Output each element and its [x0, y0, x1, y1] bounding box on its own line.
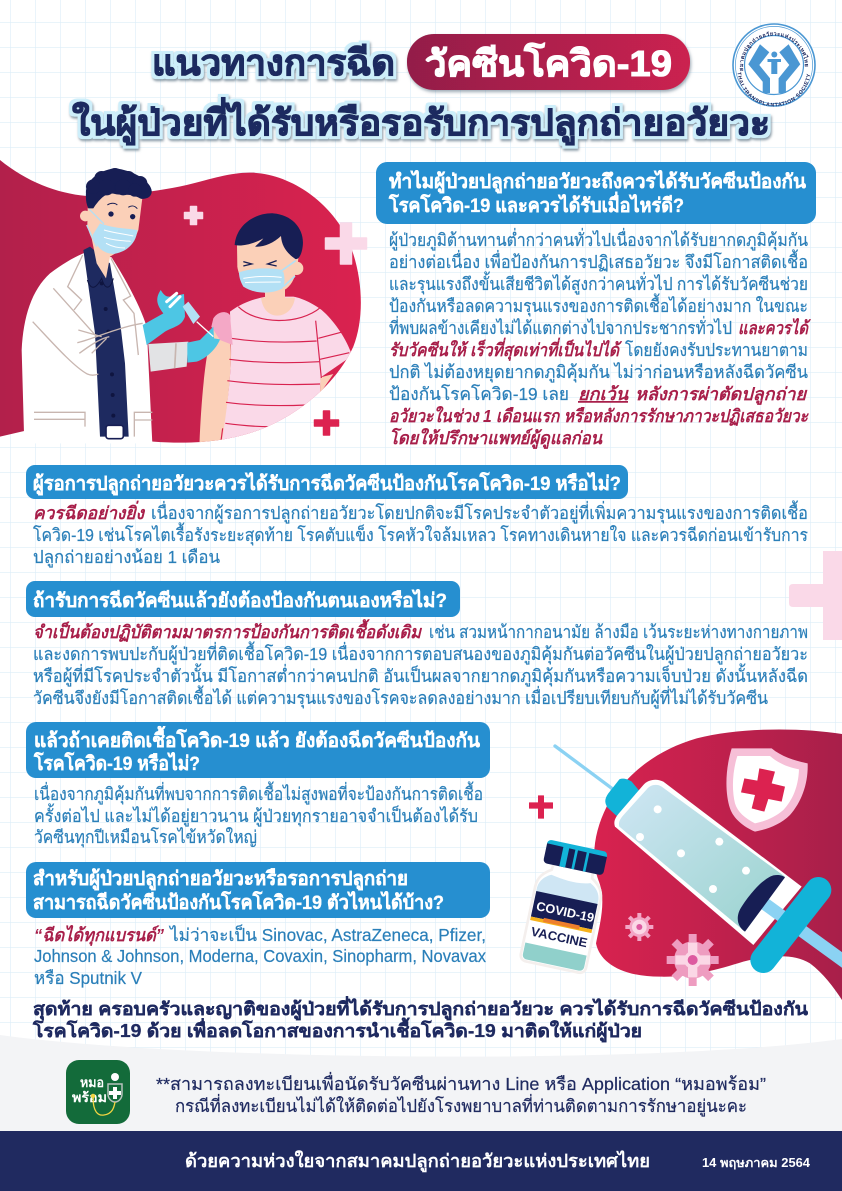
- heading: โรคโควิด-19 และควรได้รับเมื่อไหร่ดี?: [388, 191, 684, 217]
- heading: สามารถฉีดวัคซีนป้องกันโรคโควิด-19 ตัวไหนได้บ้าง?: [33, 891, 444, 914]
- title: [72, 34, 770, 146]
- text block: โดยให้ปรึกษาแพทย์ผู้ดูแลก่อน: [389, 427, 603, 449]
- plus: pink large: [326, 223, 366, 264]
- text block: Johnson & Johnson, Moderna, Covaxin, Sinopharm, Novavax: [34, 946, 486, 966]
- text block: วัคซีนทุกปีเหมือนโรคไข้หวัดใหญ่: [34, 827, 257, 848]
- text block: ผู้ป่วยภูมิต้านทานต่ำกว่าคนทั่วไปเนื่องจากได้รับยากดภูมิคุ้มกัน: [389, 228, 808, 251]
- closing statement: โรคโควิด-19 ด้วย เพื่อลดโอกาสของการนำเชื้อโควิด-19 มาติดให้แก่ผู้ป่วย: [32, 1017, 642, 1043]
- red blob: [0, 160, 361, 443]
- heading: ทำไมผู้ป่วยปลูกถ่ายอวัยวะถึงควรได้รับวัคซีนป้องกัน: [389, 170, 807, 195]
- syringe: [555, 746, 842, 963]
- text block: โดยยังคงรับประทานยาตาม: [625, 340, 808, 360]
- patient: [199, 297, 351, 447]
- virus large: [667, 934, 719, 986]
- heading: สำหรับผู้ป่วยปลูกถ่ายอวัยวะหรือรอการปลูกถ่าย: [33, 868, 408, 892]
- text block: ป้องกันหรือลดความรุนแรงของการติดเชื้อได้อย่างมาก ในขณะ: [389, 293, 808, 317]
- panel: which vaccines: [26, 862, 490, 988]
- panel: waiting for transplant: [26, 465, 808, 568]
- text block: เนื่องจากภูมิคุ้มกันที่พบจากการติดเชื้อไม่สูงพอที่จะป้องกันการติดเชื้อ: [34, 781, 483, 805]
- panel: still protect yourself: [26, 581, 808, 709]
- footer bar: [0, 1131, 842, 1191]
- red blob: [594, 729, 842, 1000]
- text block: ปลูกถ่ายอย่างน้อย 1 เดือน: [33, 547, 220, 568]
- heading: แล้วถ้าเคยติดเชื้อโควิด-19 แล้ว ยังต้องฉีดวัคซีนป้องกัน: [34, 725, 481, 752]
- vaccine vial: [520, 839, 611, 974]
- text block: และควรได้: [738, 317, 811, 338]
- text block: ควรฉีดอย่างยิ่ง: [33, 500, 145, 523]
- virus small: [625, 913, 653, 941]
- plus: pink right edge: [789, 551, 842, 640]
- heading: [26, 722, 490, 778]
- heading: โรคโควิด-19 หรือไม่?: [33, 752, 200, 775]
- registration note: [156, 1072, 766, 1117]
- text block: หรือ Sputnik V: [34, 968, 142, 988]
- text block: ไม่ว่าจะเป็น Sinovac, AstraZeneca, Pfizer,: [168, 924, 486, 945]
- doctor: [22, 168, 220, 443]
- text block: ที่พบผลข้างเคียงไม่ได้แตกต่างไปจากประชากรทั่วไป: [389, 316, 732, 338]
- text block: จำเป็นต้องปฏิบัติตามมาตรการป้องกันการติดเชื้อดังเดิม: [33, 619, 422, 642]
- icon: MorPrompt app: พร้อม: [72, 1090, 107, 1105]
- vaccine vial: VACCINE: [530, 925, 589, 950]
- logo: Thai Transplantation Society: THAI TRANSPLANTATION SOCIETY: [738, 72, 810, 106]
- text block: วัคซีนจึงยังมีโอกาสติดเชื้อได้ แต่ความรุนแรงของโรคจะลดลงอย่างมาก เมื่อเปรียบเทียบกับผู้ที่ไม่ได้รับวัคซีน: [33, 685, 768, 709]
- text block: หรือผู้ที่มีโรคประจำตัวนั้น มีโอกาสต่ำกว่าคนปกติ อันเป็นผลจากยากดภูมิคุ้มกันหรือความเจ็บป่วย ดังนั้นหลังฉีด: [33, 663, 808, 687]
- heading: [26, 581, 460, 617]
- sleeve and gloves: [148, 342, 188, 372]
- patient head: [235, 213, 303, 302]
- registration note: กรณีที่ลงทะเบียนไม่ได้ให้ติดต่อไปยังโรงพยาบาลที่ท่านติดตามการรักษาอยู่นะคะ: [175, 1094, 747, 1117]
- logo: Thai Transplantation Society: สมาคมปลูกถ่ายอวัยวะแห่งประเทศไทย: [740, 31, 808, 71]
- logo: Thai Transplantation Society: [732, 23, 816, 107]
- text block: [34, 781, 483, 848]
- shield: [726, 748, 808, 832]
- text block: หลังการผ่าตัดปลูกถ่าย: [635, 384, 808, 405]
- footer bar: ด้วยความห่วงใยจากสมาคมปลูกถ่ายอวัยวะแห่งประเทศไทย: [185, 1150, 650, 1173]
- vaccine vial: COVID-19: [535, 899, 595, 925]
- footer band: [0, 1035, 842, 1191]
- footer bar: 14 พฤษภาคม 2564: [702, 1156, 810, 1170]
- text block: [389, 228, 811, 449]
- plus: red: [314, 411, 338, 435]
- plus: red: [529, 796, 553, 818]
- text block: [33, 500, 808, 568]
- text block: ยกเว้น: [578, 384, 629, 404]
- text block: ปกติ ไม่ต้องหยุดยากดภูมิคุ้มกัน ไม่ว่าก่อนหรือหลังฉีดวัคซีน: [389, 362, 808, 383]
- text block: “ฉีดได้ทุกแบรนด์”: [34, 924, 164, 946]
- text block: ครั้งต่อไป และไม่ได้อยู่ยาวนาน ผู้ป่วยทุกรายอาจจำเป็นต้องได้รับ: [34, 803, 478, 827]
- text block: อย่างต่อเนื่อง เพื่อป้องกันการปฏิเสธอวัยวะ จึงมีโอกาสติดเชื้อ: [389, 249, 808, 272]
- title: ในผู้ป่วยที่ได้รับหรือรอรับการปลูกถ่ายอวัยวะ: [72, 97, 770, 146]
- illustration: doctor vaccinating patient: [0, 160, 361, 447]
- heading: [26, 862, 490, 918]
- title pill: วัคซีนโควิด-19: [425, 42, 672, 84]
- syringe: [167, 293, 213, 337]
- text block: รับวัคซีนให้ เร็วที่สุดเท่าที่เป็นไปได้: [389, 337, 623, 361]
- closing statement: [32, 996, 809, 1043]
- icon: MorPrompt app: [66, 1060, 130, 1124]
- text block: เนื่องจากผู้รอการปลูกถ่ายอวัยวะโดยปกติจะมีโรคประจำตัวอยู่ที่เพิ่มความรุนแรงของการติดเชื้อ: [151, 500, 808, 524]
- panel: why vaccinate: [376, 162, 816, 449]
- title pill: [407, 34, 690, 90]
- text block: ป้องกันโรคโควิด-19 เลย: [389, 384, 569, 404]
- closing statement: สุดท้าย ครอบครัวและญาติของผู้ป่วยที่ได้รับการปลูกถ่ายอวัยวะ ควรได้รับการฉีดวัคซีนป้องกัน: [33, 996, 809, 1021]
- icon: MorPrompt app: หมอ: [80, 1075, 104, 1090]
- text block: [33, 619, 808, 709]
- heading: [26, 465, 628, 499]
- heading: ถ้ารับการฉีดวัคซีนแล้วยังต้องป้องกันตนเองหรือไม่?: [33, 589, 447, 612]
- plus: pink small: [184, 206, 202, 224]
- text block: [34, 924, 486, 988]
- registration note: **สามารถลงทะเบียนเพื่อนัดรับวัคซีนผ่านทาง Line หรือ Application “หมอพร้อม”: [156, 1072, 766, 1094]
- heading: [376, 162, 816, 224]
- illustration: syringe, vial, shield: [520, 729, 842, 1000]
- panel: previously infected: [26, 722, 490, 848]
- title: แนวทางการฉีด: [152, 42, 395, 83]
- heading: ผู้รอการปลูกถ่ายอวัยวะควรได้รับการฉีดวัคซีนป้องกันโรคโควิด-19 หรือไม่?: [33, 472, 621, 497]
